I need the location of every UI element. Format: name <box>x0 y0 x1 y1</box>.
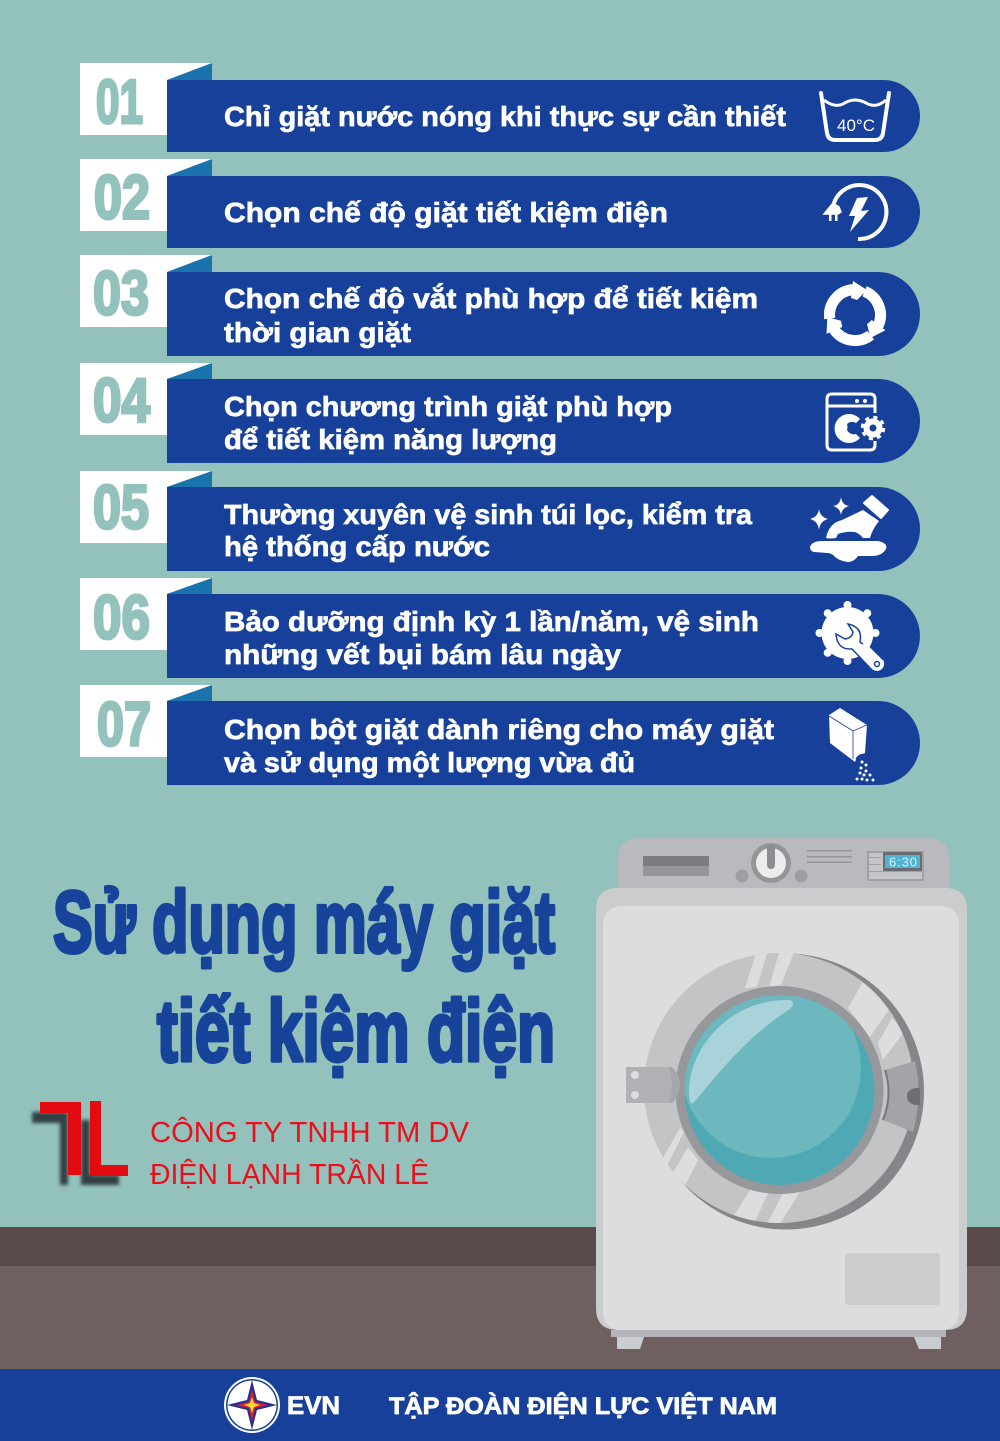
item 03: Chọn chế độ vắt phù hợp để tiết kiệm <box>224 283 758 314</box>
item 03: thời gian giặt <box>224 317 411 348</box>
floor <box>0 1227 1000 1369</box>
logo: EVN <box>224 1377 280 1433</box>
item 05: Thường xuyên vệ sinh túi lọc, kiểm tra <box>224 499 752 530</box>
item 06: Bảo dưỡng định kỳ 1 lần/năm, vệ sinh <box>224 606 759 637</box>
item 06: 06 <box>93 584 150 652</box>
door hinge <box>626 1067 680 1103</box>
item 04: để tiết kiệm năng lượng <box>224 424 557 455</box>
item 01: Chỉ giặt nước nóng khi thực sự cần thiết <box>224 101 786 132</box>
item 02: Chọn chế độ giặt tiết kiệm điện <box>224 197 668 228</box>
title <box>53 874 555 1080</box>
footer text: EVN: EVN <box>287 1392 340 1420</box>
icon: cleaning hand <box>810 496 888 562</box>
title: tiết kiệm điện <box>157 983 555 1080</box>
item 03: 03 <box>93 260 149 328</box>
item 04: Chọn chương trình giặt phù hợp <box>224 391 672 422</box>
company name <box>150 1117 469 1191</box>
item 01 <box>80 63 920 152</box>
item 02 <box>80 159 920 248</box>
logo: TL <box>32 1101 128 1185</box>
machine feet <box>611 1330 946 1349</box>
control panel: 6:30 <box>889 854 917 870</box>
item 06: những vết bụi bám lâu ngày <box>224 639 621 670</box>
icon: washing temperature 40°C <box>821 93 889 140</box>
item 07: Chọn bột giặt dành riêng cho máy giặt <box>224 714 774 745</box>
item 04 <box>80 363 920 463</box>
icon: gear and wrench <box>816 601 885 672</box>
icon: washing temperature 40°C: 40°C <box>837 116 875 135</box>
door <box>644 950 924 1230</box>
item 07: 07 <box>97 690 151 760</box>
title: Sử dụng máy giặt <box>53 874 555 971</box>
item 05: 05 <box>93 474 149 542</box>
item 07: và sử dụng một lượng vừa đủ <box>224 747 635 778</box>
control panel <box>618 838 949 888</box>
washing machine illustration <box>596 838 967 1349</box>
footer text: company: TẬP ĐOÀN ĐIỆN LỰC VIỆT NAM <box>389 1392 777 1420</box>
item 06 <box>80 578 920 678</box>
item 01: 01 <box>96 68 143 137</box>
item 04: 04 <box>93 366 150 436</box>
footer bar <box>0 1369 1000 1441</box>
icon: energy-saving plug and bolt <box>824 185 886 239</box>
item 05: hệ thống cấp nước <box>224 531 490 562</box>
item 05 <box>80 471 920 571</box>
item 07 <box>80 685 920 785</box>
icon: washing machine with gear <box>827 394 884 450</box>
company name: ĐIỆN LẠNH TRẦN LÊ <box>150 1159 429 1191</box>
item 02: 02 <box>94 164 150 232</box>
machine body <box>596 888 967 1330</box>
company name: CÔNG TY TNHH TM DV <box>150 1117 469 1149</box>
item 03 <box>80 255 920 356</box>
door handle <box>883 1061 920 1132</box>
icon: detergent box <box>829 708 874 782</box>
icon: cycle arrows <box>820 281 897 354</box>
